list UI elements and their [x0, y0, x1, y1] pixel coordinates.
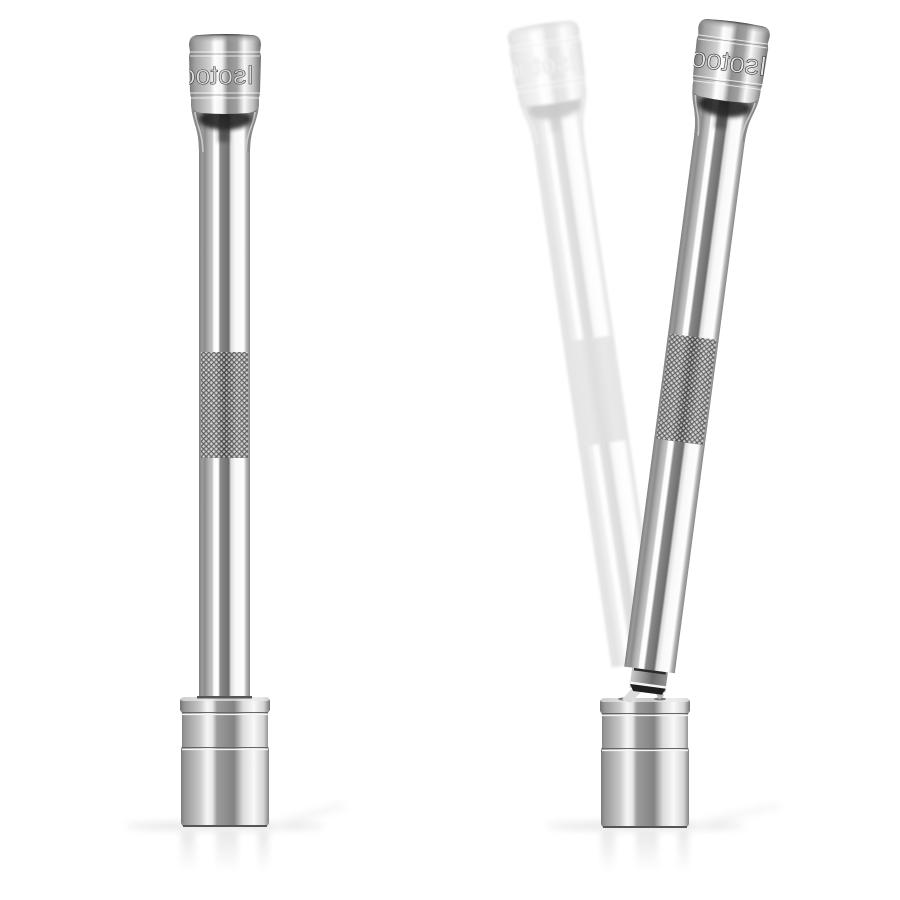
reflection: right base — [601, 830, 689, 872]
ground shadow: left tool — [125, 803, 350, 830]
reflection: left base — [181, 830, 269, 872]
right base cylinder — [600, 698, 690, 828]
illustration: two metal tools — [134, 19, 770, 857]
ghost tool: motion position — [507, 20, 642, 668]
left base cylinder — [180, 696, 270, 827]
right tool: tilted — [622, 19, 770, 702]
engraved brand on head: Isotool — [683, 40, 769, 82]
ground shadow: right tool — [545, 803, 785, 830]
ghost tool: motion position: Isotool — [496, 45, 579, 87]
hex tip and socket legs — [622, 665, 669, 707]
left tool: upright in base — [189, 34, 261, 696]
engraved brand on head: Isotool — [174, 60, 254, 90]
